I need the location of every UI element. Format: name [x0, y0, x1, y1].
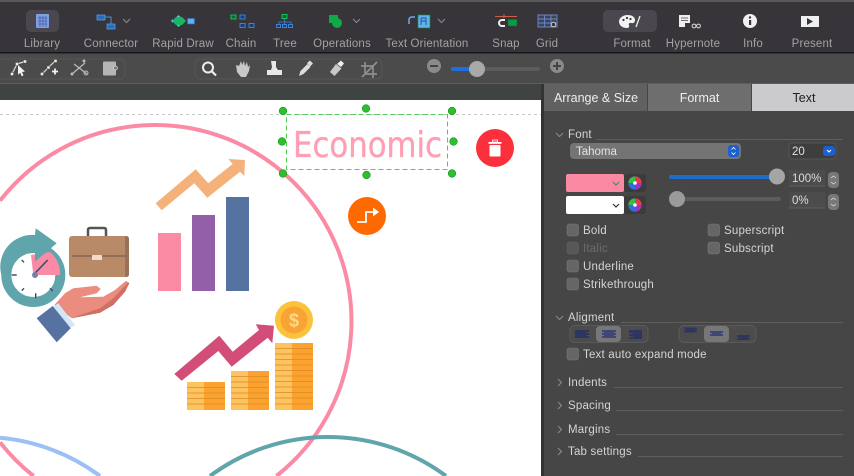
- tabs: [544, 84, 854, 111]
- rapid draw button: Rapid Draw: [152, 38, 214, 50]
- text orientation button: [386, 15, 468, 50]
- alignment section: Text auto expand mode: [583, 349, 707, 361]
- circle: teal: [210, 437, 446, 476]
- canvas: [0, 84, 541, 476]
- style checkboxes: Underline: [583, 261, 634, 273]
- colour wheel: [628, 176, 642, 190]
- collapsed sections: Spacing: [568, 400, 611, 412]
- tabs: Text: [793, 91, 816, 105]
- hypernote button: [666, 15, 720, 50]
- snap button: [492, 14, 520, 50]
- circle: blue: [0, 438, 100, 476]
- text orientation button: Text Orientation: [386, 38, 468, 50]
- dollar coin: $: [289, 310, 299, 330]
- tabs: Format: [680, 91, 720, 105]
- font size: 20: [792, 146, 805, 158]
- secondary toolbar: [0, 54, 854, 84]
- font section: [556, 129, 843, 291]
- hypernote button: Hypernote: [666, 38, 720, 50]
- icon: coins with arrow: [174, 301, 313, 410]
- opacity slider: 100%: [792, 173, 821, 185]
- font size: [789, 143, 836, 159]
- rapid draw button: [152, 15, 214, 50]
- colour wheel: [628, 198, 642, 212]
- tree button: [273, 14, 297, 50]
- grid button: Grid: [536, 38, 558, 50]
- icon: delete button: [476, 129, 514, 167]
- present button: Present: [792, 38, 833, 50]
- icon: bar chart with arrow: [156, 159, 249, 291]
- format button: Format: [613, 38, 651, 50]
- font dropdown: Tahoma: [576, 146, 618, 158]
- circle: pink: [0, 125, 351, 476]
- style checkboxes: Strikethrough: [583, 279, 654, 291]
- chain button: [226, 15, 256, 50]
- vertical alignment buttons: [679, 326, 756, 342]
- collapsed sections: Tab settings: [568, 446, 632, 458]
- snap button: Snap: [492, 38, 520, 50]
- alignment section: Aligment: [568, 312, 615, 324]
- opacity slider: [669, 168, 839, 188]
- style checkboxes: [567, 224, 785, 291]
- alignment section: [556, 312, 843, 361]
- connector button: Connector: [84, 38, 138, 50]
- horizontal alignment buttons: [570, 326, 648, 342]
- collapsed sections: Margins: [568, 424, 610, 436]
- library button: [24, 10, 60, 50]
- coin stack small: [187, 382, 225, 410]
- style checkboxes: Italic: [583, 243, 608, 255]
- icon: clock, briefcase and hand: [0, 228, 129, 342]
- briefcase: [69, 228, 129, 277]
- info button: Info: [743, 38, 763, 50]
- hand: [37, 281, 129, 342]
- tree button: Tree: [273, 38, 297, 50]
- style checkboxes: Bold: [583, 225, 607, 237]
- grid button: [536, 15, 558, 50]
- operations button: Operations: [313, 38, 371, 50]
- chain button: Chain: [226, 38, 256, 50]
- style checkboxes: Subscript: [724, 243, 774, 255]
- second slider: 0%: [792, 195, 809, 207]
- selected text: Economic: [278, 105, 457, 179]
- coin stack large: [275, 343, 313, 410]
- style checkboxes: Superscript: [724, 225, 785, 237]
- selected text: Economic: Economic: [293, 125, 442, 166]
- coin stack medium: [231, 371, 269, 410]
- connector button: [84, 15, 138, 50]
- tabs: Arrange & Size: [554, 91, 638, 105]
- present button: [792, 16, 833, 50]
- zoom slider: [427, 59, 564, 77]
- info button: [743, 14, 763, 50]
- collapsed sections: [558, 377, 843, 458]
- font section: Font: [568, 129, 592, 141]
- second slider: [669, 191, 839, 210]
- icon: connector button: [348, 197, 386, 235]
- clock: [0, 228, 60, 302]
- font dropdown: [570, 143, 741, 159]
- edit point tools: [0, 59, 125, 79]
- inspector panel: [541, 84, 854, 476]
- operations button: [313, 15, 371, 50]
- library button: Library: [24, 38, 60, 50]
- background colour well: [566, 196, 646, 214]
- collapsed sections: Indents: [568, 377, 607, 389]
- format button: [603, 10, 657, 50]
- view tools: [195, 59, 382, 79]
- text colour well: [566, 174, 646, 192]
- top toolbar: [0, 0, 854, 54]
